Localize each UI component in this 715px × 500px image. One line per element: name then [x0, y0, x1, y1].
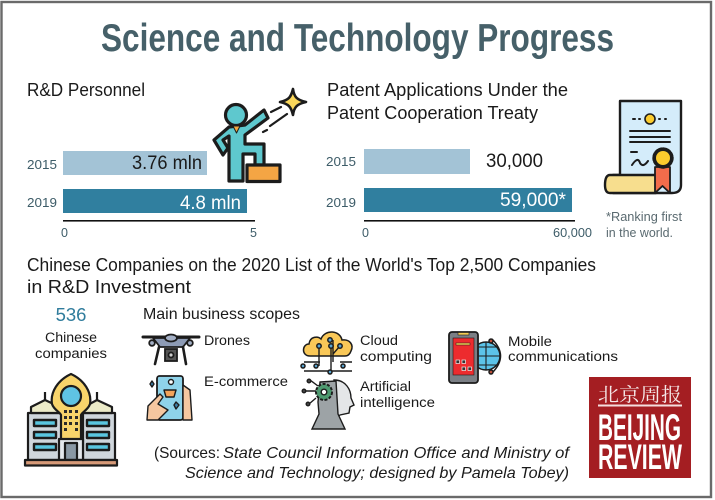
icon: patent certificate: [605, 101, 681, 193]
panel: R&D personnel: [27, 80, 257, 240]
bar chart: R&D personnel: 2019: [27, 196, 57, 210]
bar chart: patent applications: 60,000: [553, 226, 592, 240]
logo: Beijing Review: 北京周报: [598, 380, 682, 407]
item: cloud computing: [301, 332, 432, 374]
stat: 536 Chinese companies: [35, 304, 107, 361]
source note: Science and Technology; designed by Pamela Tobey): [185, 465, 569, 482]
bar chart: patent applications: 30,000: [486, 150, 543, 172]
footnote: *Ranking first: [606, 210, 683, 224]
source note: (Sources:: [154, 445, 220, 462]
icon: AI head: [302, 379, 354, 429]
item: drones: [143, 333, 250, 364]
bar chart: R&D personnel: [27, 151, 257, 240]
icon: shopping on phone: [147, 376, 192, 420]
item: cloud computing: computing: [360, 349, 432, 364]
item: cloud computing: Cloud: [360, 333, 398, 348]
stat: 536 Chinese companies: companies: [35, 346, 107, 361]
panel: patent applications: [326, 80, 592, 240]
footnote: in the world.: [606, 226, 673, 240]
bar chart: R&D personnel: 0: [61, 226, 68, 240]
bar chart: patent applications: 59,000*: [500, 189, 566, 211]
icon: cloud circuit: [301, 332, 352, 374]
heading: Chinese companies: in R&D Investment: [27, 277, 191, 297]
item: drones: Drones: [204, 333, 250, 348]
icon: person reaching for star: [214, 89, 306, 182]
source note: State Council Information Office and Ministry of: [223, 445, 571, 462]
bar chart: patent applications: 0: [362, 226, 369, 240]
heading: main business scopes: Main business scopes: [143, 306, 300, 323]
stat: 536 Chinese companies: Chinese: [45, 330, 97, 345]
icon: drone: [143, 334, 199, 364]
panel: patent applications: Patent Cooperation Treaty: [327, 103, 538, 123]
item: artificial intelligence: Artificial: [360, 379, 411, 394]
stat: 536 Chinese companies: 536: [56, 304, 86, 325]
icon: phone and globe: [449, 332, 500, 383]
bar chart: patent applications: 2015: [326, 155, 356, 169]
item: artificial intelligence: intelligence: [360, 395, 435, 410]
bar chart: patent applications: [326, 149, 592, 240]
heading: Chinese companies: Chinese Companies on the 2020 List of the World's Top 2,500 Companies: [27, 255, 596, 275]
bar chart: R&D personnel: 5: [250, 226, 257, 240]
heading: patent applications: Patent Applications Under the: [327, 80, 568, 100]
footnote: [606, 210, 683, 240]
item: mobile communications: Mobile: [508, 334, 552, 349]
icon: company building: [25, 374, 117, 466]
item: mobile communications: communications: [508, 349, 618, 364]
bar chart: R&D personnel: 3.76 mln: [132, 152, 202, 174]
item: e-commerce: [147, 374, 288, 420]
bar chart: R&D personnel: 2015: [27, 158, 57, 172]
item: mobile communications: [449, 332, 618, 383]
bar chart: R&D personnel: 4.8 mln: [180, 192, 241, 214]
item: artificial intelligence: [302, 379, 435, 429]
heading: Chinese companies: [27, 255, 596, 297]
item: e-commerce: E-commerce: [204, 374, 288, 389]
heading: R&D personnel: R&D Personnel: [27, 80, 145, 100]
source note: [154, 445, 571, 482]
bar chart: patent applications: 2019: [326, 196, 356, 210]
logo: Beijing Review: [589, 377, 691, 478]
